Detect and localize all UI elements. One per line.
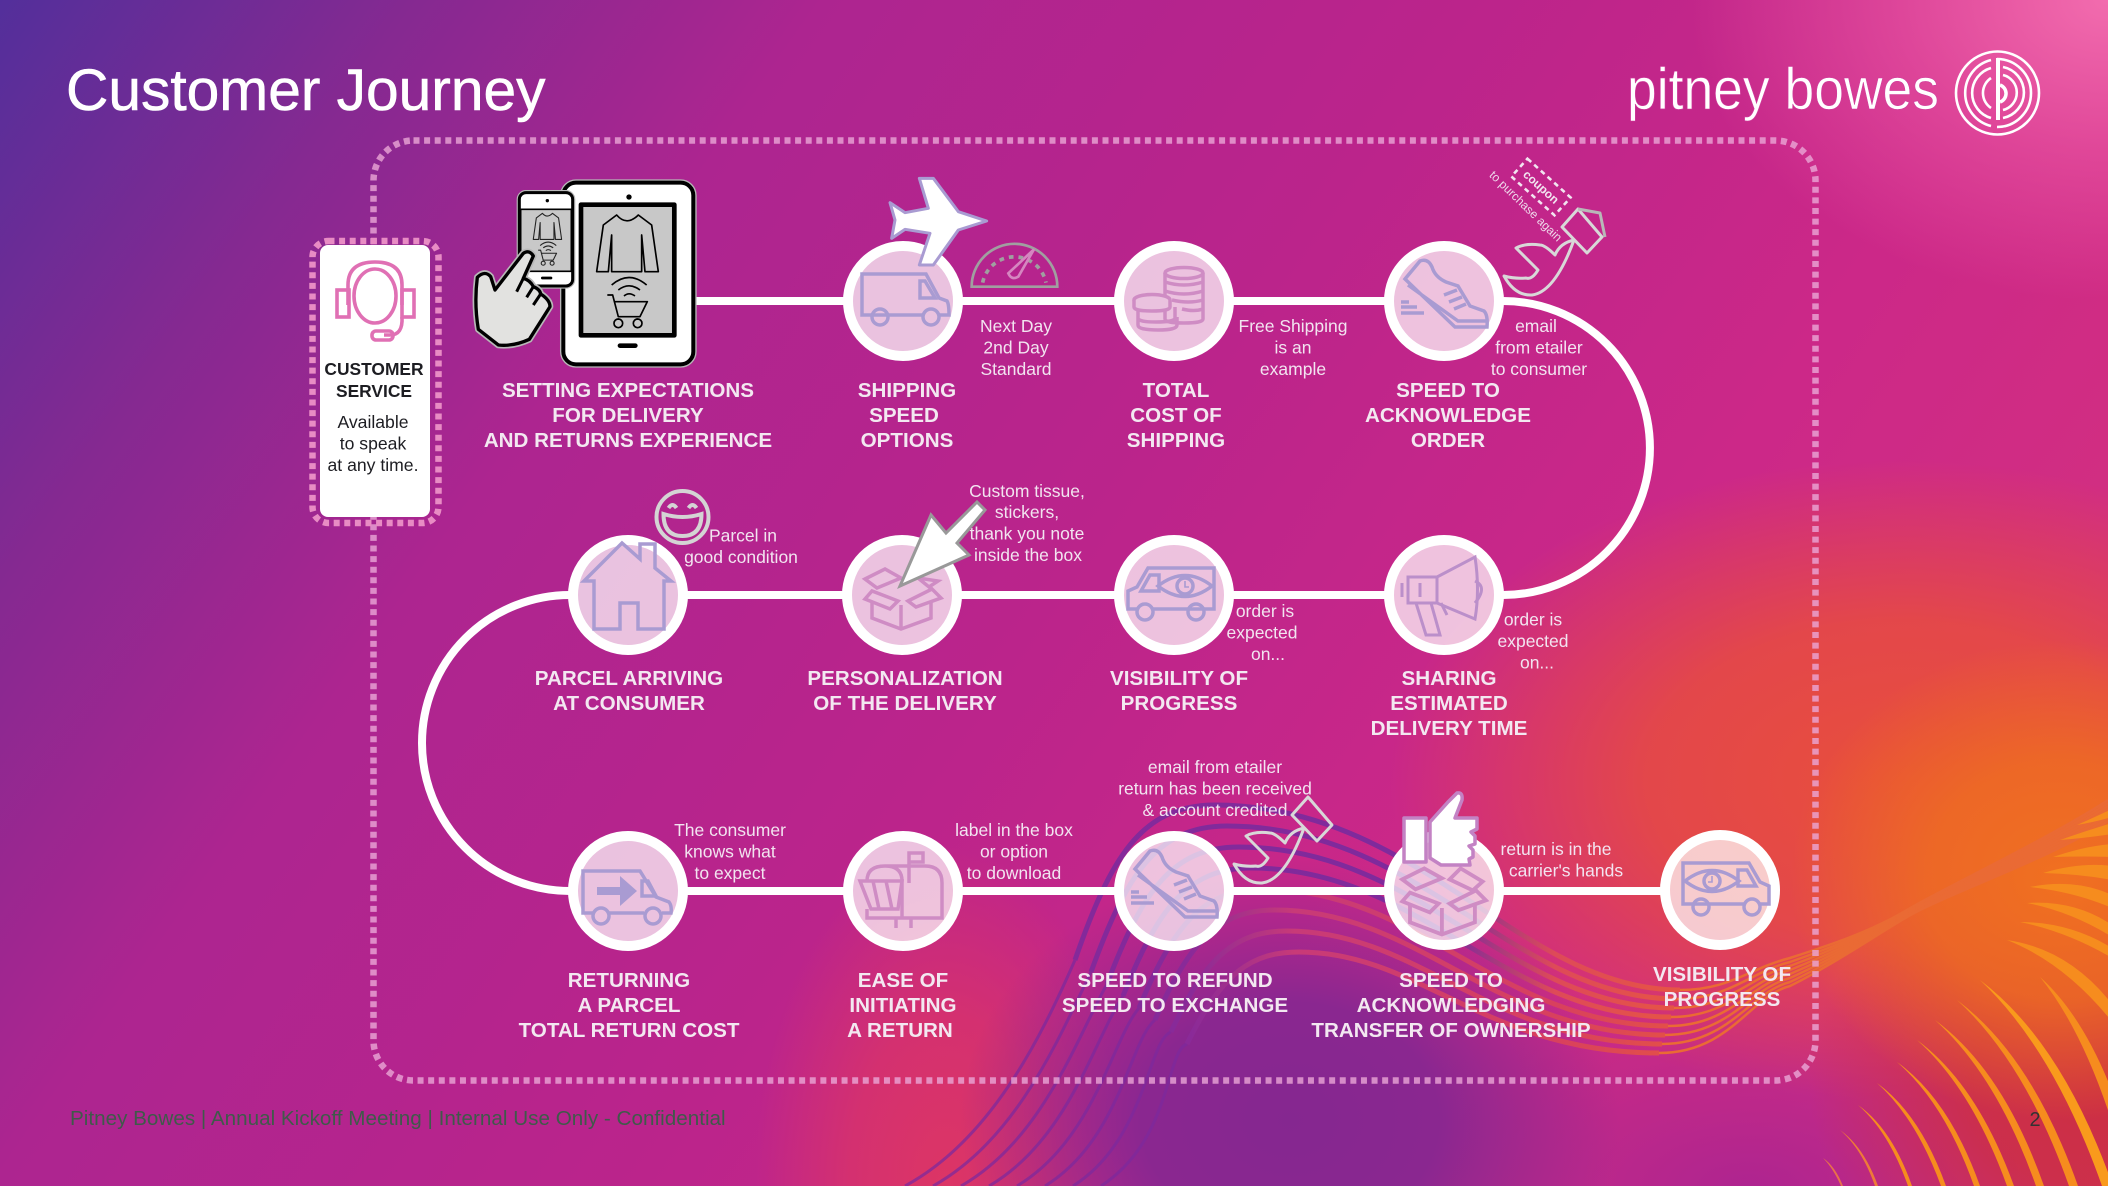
- step: shipping speed options: [848, 178, 1057, 452]
- label: shipping speed options: SPEED: [869, 404, 939, 427]
- label: total cost of shipping: TOTAL: [1143, 379, 1209, 402]
- label: personalization of the delivery: OF THE DELIVERY: [813, 692, 997, 715]
- note: order expected: expected: [1226, 622, 1298, 642]
- note: return label: to download: [967, 863, 1061, 883]
- label: speed to acknowledge order: ORDER: [1411, 429, 1485, 452]
- note: carrier's hands: carrier's hands: [1509, 860, 1623, 880]
- label: visibility of progress: VISIBILITY OF: [1653, 963, 1791, 986]
- icon: tablet, phone and hand: [476, 183, 693, 364]
- node: delivery truck: [848, 246, 958, 356]
- node: truck with eye: [1119, 540, 1229, 650]
- label: returning a parcel: RETURNING: [568, 969, 690, 992]
- journey track line: [422, 301, 1662, 891]
- label: setting expectations: AND RETURNS EXPERIENCE: [484, 429, 772, 452]
- note: delivery speeds: 2nd Day: [983, 338, 1049, 358]
- icon: smiley: [656, 491, 708, 543]
- note: custom packaging: stickers,: [995, 502, 1059, 522]
- note: order expected: expected: [1497, 631, 1569, 651]
- note: custom packaging: Custom tissue,: [969, 481, 1085, 501]
- node: open box: [847, 540, 957, 650]
- step: parcel arriving at consumer: [535, 491, 798, 715]
- label: total cost of shipping: SHIPPING: [1127, 429, 1225, 452]
- step: speed to acknowledging transfer of ownership: [1311, 793, 1623, 1042]
- page number: 2: [2029, 1109, 2041, 1131]
- customer service text: to speak: [340, 434, 406, 454]
- label: sharing estimated delivery time: DELIVERY TIME: [1371, 717, 1527, 740]
- note: order expected: on...: [1520, 652, 1554, 672]
- node: truck with arrow: [573, 836, 683, 946]
- note: order expected: order is: [1236, 601, 1294, 621]
- label: setting expectations: SETTING EXPECTATIONS: [502, 379, 754, 402]
- step: speed to refund or exchange: [1062, 757, 1332, 1017]
- logo emblem: [1956, 52, 2039, 134]
- customer service text: Available: [337, 412, 409, 432]
- label: ease of initiating a return: EASE OF: [858, 969, 948, 992]
- note: email to consumer: from etailer: [1495, 338, 1583, 358]
- node: running shoe: [1389, 246, 1499, 356]
- node: house: [573, 540, 683, 650]
- node: truck with eye: [1665, 835, 1775, 945]
- label: ease of initiating a return: A RETURN: [847, 1019, 953, 1042]
- icon: plane: [890, 178, 987, 265]
- node: open box: [1389, 835, 1499, 945]
- node: megaphone: [1389, 540, 1499, 650]
- label: speed to acknowledge order: ACKNOWLEDGE: [1365, 404, 1531, 427]
- label: speed to acknowledge order: SPEED TO: [1396, 379, 1500, 402]
- title: Customer Journey: [66, 58, 546, 123]
- note: delivery speeds: Standard: [980, 359, 1052, 379]
- label: personalization of the delivery: PERSONALIZATION: [807, 667, 1003, 690]
- icon: headset: [337, 262, 414, 340]
- label: visibility of progress: VISIBILITY OF: [1110, 667, 1248, 690]
- logo: pitney bowes: [1627, 52, 2039, 134]
- note: email to consumer: email: [1515, 316, 1557, 336]
- label: parcel arriving at consumer: PARCEL ARRIVING: [535, 667, 723, 690]
- node: mailbox: [848, 836, 958, 946]
- note: free shipping: example: [1260, 359, 1326, 379]
- note: delivery speeds: Next Day: [980, 316, 1052, 336]
- node: coins: [1119, 246, 1229, 356]
- note: parcel condition: Parcel in: [709, 526, 777, 546]
- step: sharing estimated delivery time: [1371, 540, 1569, 740]
- node: running shoe: [1119, 836, 1229, 946]
- note: custom packaging: thank you note: [970, 524, 1084, 544]
- note: parcel condition: good condition: [684, 547, 798, 567]
- note: consumer expectation: The consumer: [674, 820, 786, 840]
- step: speed to acknowledge order: [1365, 159, 1605, 452]
- note: order expected: order is: [1504, 610, 1562, 630]
- label: speed to acknowledging transfer of ownership: ACKNOWLEDGING: [1357, 994, 1545, 1017]
- footer text: Pitney Bowes | Annual Kickoff Meeting | Internal Use Only - Confidential: [70, 1107, 726, 1130]
- panel: customer service: SERVICE: [336, 381, 412, 401]
- note: return received: & account credited: [1143, 800, 1287, 820]
- note: order expected: on...: [1251, 644, 1285, 664]
- label: parcel arriving at consumer: AT CONSUMER: [553, 692, 705, 715]
- label: visibility of progress: PROGRESS: [1121, 692, 1237, 715]
- icon: dove carrying envelope: [1504, 209, 1605, 295]
- label: total cost of shipping: COST OF: [1130, 404, 1222, 427]
- note: email to consumer: to consumer: [1491, 359, 1587, 379]
- step: total cost of shipping: [1119, 246, 1347, 452]
- label: speed to refund, speed to exchange: SPEED TO REFUND: [1077, 969, 1273, 992]
- customer service card: [320, 245, 430, 517]
- label: sharing estimated delivery time: SHARING: [1402, 667, 1496, 690]
- note: return received: email from etailer: [1148, 757, 1282, 777]
- note: to purchase again: to purchase again: [1487, 168, 1565, 244]
- label: returning a parcel: TOTAL RETURN COST: [519, 1019, 740, 1042]
- label: shipping speed options: SHIPPING: [858, 379, 956, 402]
- label: speed to acknowledging transfer of ownership: SPEED TO: [1399, 969, 1503, 992]
- note: return received: return has been received: [1118, 778, 1312, 798]
- note: free shipping: is an: [1275, 338, 1311, 358]
- journey outer dashed border: [374, 140, 1816, 1080]
- label: ease of initiating a return: INITIATING: [849, 994, 957, 1017]
- step: ease of initiating a return: [847, 820, 1073, 1042]
- coupon: coupon: [1520, 167, 1562, 207]
- customer service dashed frame: [312, 241, 438, 523]
- note: free shipping: Free Shipping: [1239, 316, 1347, 336]
- note: return label: or option: [980, 842, 1048, 862]
- step: final visibility of progress: [1653, 835, 1791, 1011]
- step: visibility of progress: [1110, 540, 1298, 715]
- icon: speedometer: [972, 244, 1057, 287]
- note: carrier's hands: return is in the: [1501, 839, 1611, 859]
- icon: thumbs up: [1404, 793, 1477, 865]
- label: visibility of progress: PROGRESS: [1664, 988, 1780, 1011]
- label: speed to acknowledging transfer of ownership: TRANSFER OF OWNERSHIP: [1311, 1019, 1591, 1042]
- label: returning a parcel: A PARCEL: [578, 994, 680, 1017]
- icon: arrow into box: [900, 502, 985, 586]
- note: consumer expectation: knows what: [684, 842, 776, 862]
- customer service text: at any time.: [328, 455, 418, 475]
- customer service heading: CUSTOMER: [324, 359, 424, 379]
- label: speed to refund, speed to exchange: SPEED TO EXCHANGE: [1062, 994, 1288, 1017]
- label: setting expectations: FOR DELIVERY: [552, 404, 704, 427]
- step: returning a parcel: [519, 820, 786, 1042]
- logo wordmark: pitney bowes: [1627, 57, 1939, 122]
- label: sharing estimated delivery time: ESTIMATED: [1390, 692, 1508, 715]
- panel: customer service: [312, 241, 438, 523]
- icon: dove carrying envelope: [1234, 797, 1332, 883]
- note: custom packaging: inside the box: [974, 545, 1082, 565]
- coupon: [1511, 159, 1571, 215]
- note: consumer expectation: to expect: [694, 863, 766, 883]
- label: shipping speed options: OPTIONS: [861, 429, 953, 452]
- note: return label: label in the box: [955, 820, 1073, 840]
- step: setting expectations: [476, 183, 772, 452]
- step: personalization of the delivery: [807, 481, 1085, 715]
